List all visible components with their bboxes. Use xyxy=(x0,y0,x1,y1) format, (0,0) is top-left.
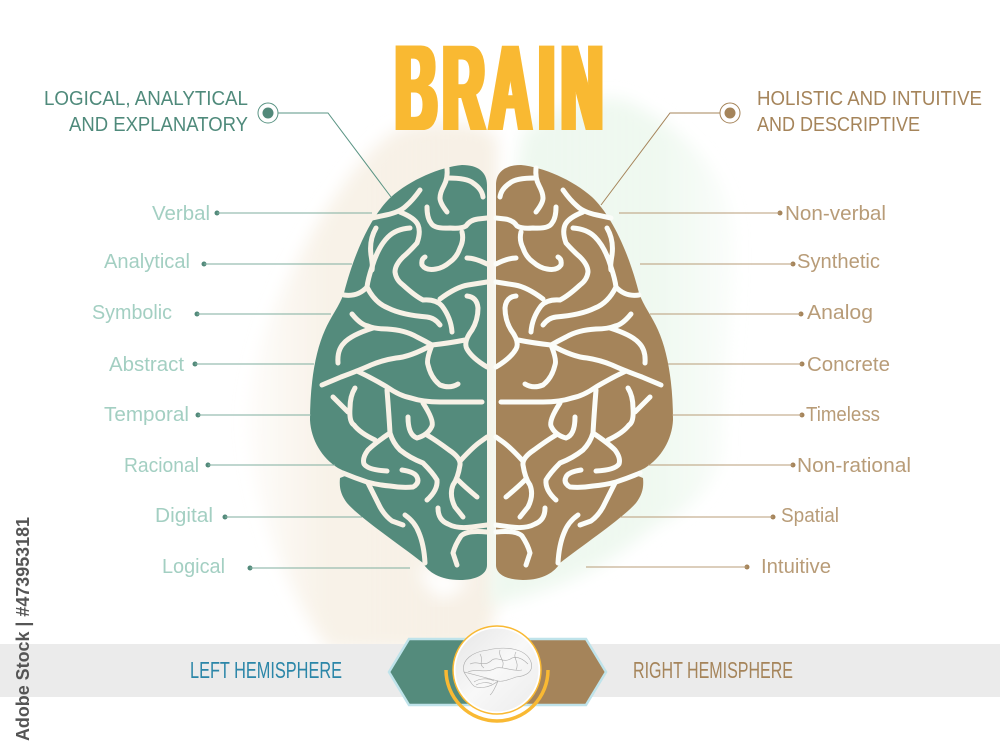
label: logical: Logical xyxy=(162,556,225,578)
bottom band xyxy=(0,644,1000,697)
label: intuitive: Intuitive xyxy=(761,556,831,578)
label: timeless xyxy=(672,404,880,426)
label: digital xyxy=(155,505,362,527)
left trait labels xyxy=(92,203,410,578)
stock image credit: Adobe Stock | #473953181 xyxy=(13,517,33,741)
label: synthetic xyxy=(640,251,880,273)
label: temporal: Temporal xyxy=(104,404,189,426)
label: analog xyxy=(650,302,873,324)
label: abstract xyxy=(109,354,314,376)
left heading: logical, analytical and explanatory xyxy=(44,88,248,136)
label: abstract: Abstract xyxy=(109,354,184,376)
icon: brain sketch xyxy=(464,648,532,695)
badge: left half xyxy=(389,639,497,705)
label: concrete: Concrete xyxy=(807,354,890,376)
right heading: holistic and intuitive and descriptive xyxy=(757,88,982,136)
left hemisphere caption: LEFT HEMISPHERE xyxy=(190,657,342,683)
right trait labels xyxy=(586,203,911,578)
left heading: logical, analytical and explanatory: LOGICAL, ANALYTICAL xyxy=(44,88,248,110)
label: racional: Racional xyxy=(124,455,199,477)
label: analog: Analog xyxy=(807,302,873,324)
label: non-verbal: Non-verbal xyxy=(785,203,886,225)
label: verbal xyxy=(152,203,372,225)
label: spatial: Spatial xyxy=(781,505,839,527)
watercolor wash: right xyxy=(490,98,734,605)
right heading: holistic and intuitive and descriptive: HOLISTIC AND INTUITIVE xyxy=(757,88,982,110)
badge: disc xyxy=(453,626,541,714)
white gap in the wash below the brain xyxy=(418,565,470,600)
label: non-verbal xyxy=(619,203,886,225)
watercolor wash: left xyxy=(247,123,497,650)
right heading: holistic and intuitive and descriptive: AND DESCRIPTIVE xyxy=(757,114,920,136)
label: symbolic xyxy=(92,302,331,324)
label: analytical xyxy=(104,251,352,273)
brain: left hemisphere xyxy=(310,165,487,580)
label: verbal: Verbal xyxy=(152,203,210,225)
right hemisphere caption: RIGHT HEMISPHERE xyxy=(633,657,793,683)
label: temporal xyxy=(104,404,311,426)
label: digital: Digital xyxy=(155,505,213,527)
label: intuitive xyxy=(586,556,831,578)
label: logical xyxy=(162,556,410,578)
label: synthetic: Synthetic xyxy=(797,251,880,273)
brain: right hemisphere xyxy=(496,165,673,580)
label: racional xyxy=(124,455,335,477)
badge: yellow arc xyxy=(446,670,548,721)
label: analytical: Analytical xyxy=(104,251,190,273)
label: symbolic: Symbolic xyxy=(92,302,172,324)
label: timeless: Timeless xyxy=(806,404,880,426)
badge: right half xyxy=(497,639,606,705)
hexagon badge xyxy=(389,626,606,721)
title: BRAIN xyxy=(395,20,603,157)
right callout marker and leader line xyxy=(601,103,740,205)
label: concrete xyxy=(668,354,890,376)
label: non-rational: Non-rational xyxy=(797,455,911,477)
left heading: logical, analytical and explanatory: AND EXPLANATORY xyxy=(69,114,248,136)
label: spatial xyxy=(620,505,839,527)
label: non-rational xyxy=(648,455,911,477)
left callout marker and leader line xyxy=(258,103,391,197)
